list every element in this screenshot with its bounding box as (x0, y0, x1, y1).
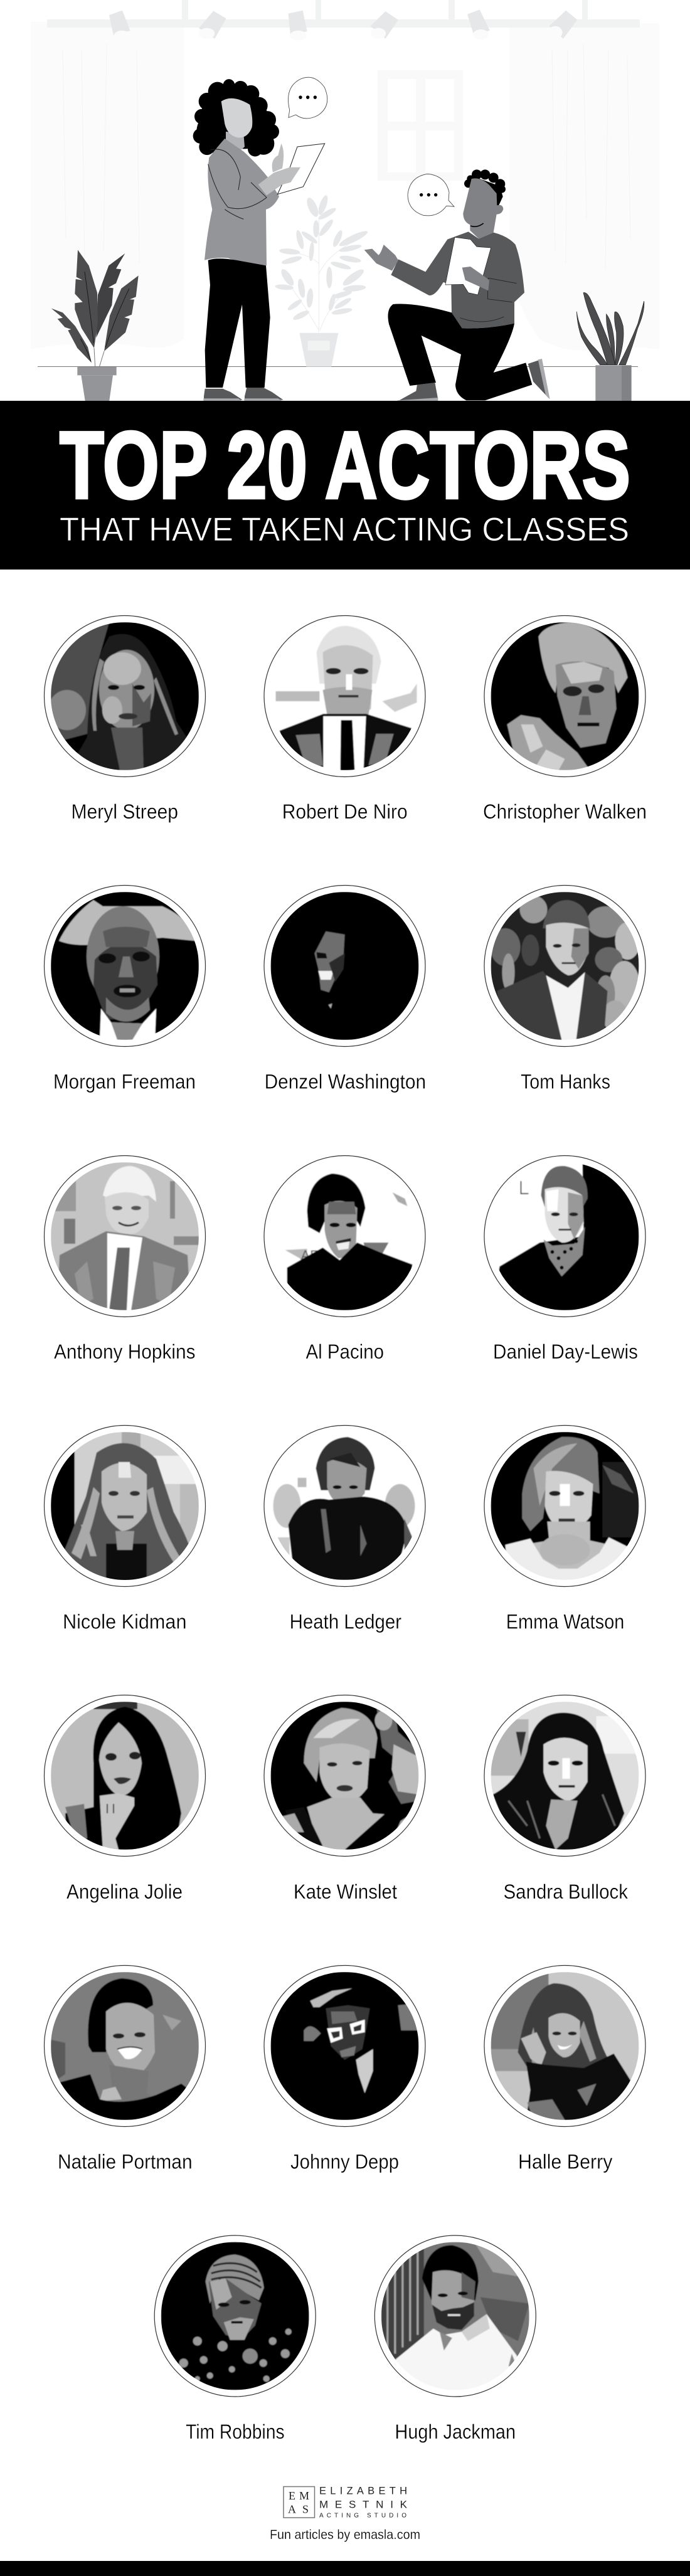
woman hands (258, 144, 300, 195)
woman shoes (204, 388, 284, 400)
logo monogram box: AS (288, 2503, 309, 2515)
script page (277, 144, 325, 194)
footer bar (0, 2561, 690, 2576)
portrait: Natalie Portman (44, 1966, 206, 2126)
portrait: Angelina Jolie (44, 1695, 206, 1857)
logo wordmark: ACTING STUDIO (319, 2513, 406, 2519)
logo monogram box (284, 2486, 315, 2518)
curtain folds (63, 44, 630, 270)
portrait: Hugh Jackman (374, 2235, 536, 2397)
portrait: Al Pacino: AFI (301, 1248, 322, 1263)
man head (463, 178, 503, 239)
actor card: Tom Hanks (484, 886, 645, 1093)
window (378, 70, 463, 181)
footer credit: Fun articles by emasla.com (270, 2528, 420, 2542)
name: Heath Ledger: Heath Ledger (290, 1611, 401, 1633)
name: Natalie Portman: Natalie Portman (58, 2150, 193, 2173)
woman reading script (193, 77, 327, 401)
man sweater (391, 231, 524, 329)
logo wordmark: ELIZABETH (319, 2486, 407, 2497)
floor line (38, 366, 638, 368)
portrait: Tim Robbins (154, 2235, 316, 2397)
name: Robert De Niro: Robert De Niro (282, 800, 408, 823)
left potted plant (51, 250, 139, 402)
actor card: Christopher Walken (483, 616, 647, 823)
man shoes (397, 359, 549, 401)
actor card: Heath Ledger (264, 1425, 425, 1633)
right potted plant (576, 293, 644, 401)
name: Morgan Freeman: Morgan Freeman (53, 1070, 196, 1093)
name: Kate Winslet: Kate Winslet (294, 1880, 397, 1903)
man holding hand (462, 267, 489, 290)
name: Al Pacino: Al Pacino (306, 1340, 384, 1363)
actor card: Sandra Bullock (484, 1695, 645, 1903)
portrait: Daniel Day-Lewis (484, 1155, 645, 1317)
portrait: Denzel Washington (264, 886, 425, 1046)
woman trousers (205, 258, 270, 388)
name: Tim Robbins: Tim Robbins (186, 2420, 285, 2443)
logo wordmark: MESTNIK (319, 2498, 408, 2510)
name: Meryl Streep: Meryl Streep (72, 800, 178, 823)
actor card: Johnny Depp (264, 1966, 425, 2173)
man script (445, 237, 491, 295)
portrait: Anthony Hopkins (44, 1155, 206, 1317)
portrait: Emma Watson (484, 1425, 645, 1587)
actor card: Tim Robbins (154, 2235, 316, 2443)
kneeling man with script (364, 169, 550, 403)
actor card: Natalie Portman (44, 1966, 206, 2173)
actor card: Meryl Streep (44, 616, 206, 823)
actor card: Angelina Jolie (44, 1695, 206, 1903)
name: Anthony Hopkins: Anthony Hopkins (54, 1340, 196, 1363)
name: Emma Watson: Emma Watson (506, 1611, 624, 1633)
studio logo (284, 2486, 408, 2519)
woman neck (226, 132, 245, 152)
man open hand (364, 245, 398, 271)
actor card: Daniel Day-Lewis (484, 1155, 645, 1363)
woman speech bubble (288, 77, 327, 119)
woman shirt (204, 139, 279, 265)
portrait: Nicole Kidman (44, 1425, 206, 1587)
actor card: Morgan Freeman (44, 886, 206, 1093)
logo monogram box: EM (289, 2489, 309, 2502)
portrait: Sandra Bullock (484, 1695, 645, 1857)
portrait: Heath Ledger (264, 1425, 425, 1587)
man hair (464, 169, 506, 210)
portrait: Halle Berry (484, 1966, 645, 2126)
stage spotlights (109, 9, 577, 41)
actor card: Nicole Kidman (44, 1425, 206, 1633)
actor card: Kate Winslet (264, 1695, 425, 1903)
name: Christopher Walken: Christopher Walken (483, 800, 647, 823)
name: Tom Hanks: Tom Hanks (521, 1070, 610, 1093)
portrait: Morgan Freeman (44, 886, 206, 1046)
woman hair (193, 79, 279, 156)
name: Johnny Depp: Johnny Depp (290, 2150, 399, 2173)
portrait: Kate Winslet (264, 1695, 425, 1857)
right curtain (509, 23, 659, 351)
portrait: Robert De Niro (264, 616, 425, 777)
hero illustration: acting scene (31, 0, 659, 403)
name: Sandra Bullock: Sandra Bullock (503, 1880, 629, 1903)
name: Daniel Day-Lewis: Daniel Day-Lewis (493, 1340, 638, 1363)
name: Nicole Kidman: Nicole Kidman (63, 1611, 187, 1633)
portrait: Al Pacino (264, 1155, 425, 1317)
actor card: Denzel Washington (264, 886, 426, 1093)
man trousers (388, 304, 532, 400)
actor card: Hugh Jackman (374, 2235, 536, 2443)
actor card: Al Pacino (264, 1155, 425, 1363)
actor card: Robert De Niro (264, 616, 425, 823)
title banner (0, 401, 690, 570)
portrait: Meryl Streep (44, 616, 206, 777)
man speech bubble (408, 174, 454, 216)
left curtain (31, 22, 184, 349)
logo wordmark (319, 2486, 408, 2519)
actor card: Halle Berry (484, 1966, 645, 2173)
name: Halle Berry: Halle Berry (518, 2150, 612, 2173)
name: Angelina Jolie: Angelina Jolie (66, 1880, 183, 1903)
actor card: Anthony Hopkins (44, 1155, 206, 1363)
portrait: Christopher Walken (484, 616, 645, 777)
lighting rail (47, 0, 640, 28)
portrait: Tom Hanks (484, 886, 645, 1046)
name: Hugh Jackman: Hugh Jackman (395, 2420, 516, 2443)
actor card: Emma Watson (484, 1425, 645, 1633)
subtitle: THAT HAVE TAKEN ACTING CLASSES (60, 511, 629, 548)
woman face (221, 98, 252, 138)
portrait: Johnny Depp (264, 1966, 425, 2126)
name: Denzel Washington: Denzel Washington (265, 1070, 426, 1093)
background plant (275, 194, 369, 367)
